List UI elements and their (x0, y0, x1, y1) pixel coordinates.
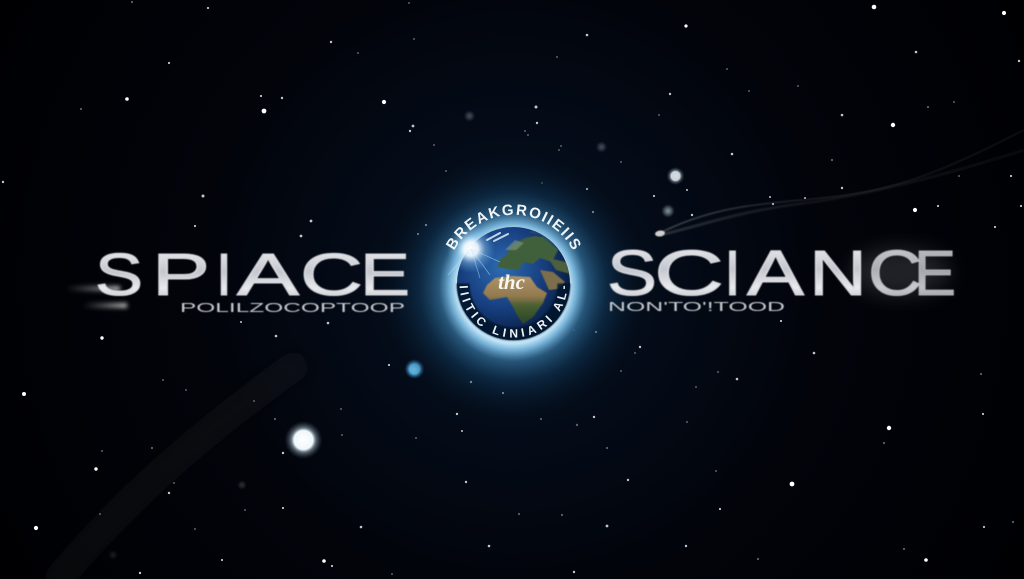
right subtitle: NON'TO'!TOOD (608, 300, 785, 314)
motion streaks on S (66, 286, 127, 308)
globe ocean (457, 227, 570, 340)
sunlight flare (447, 225, 500, 278)
right word blur glow (850, 248, 950, 296)
left subtitle: POLILZOCOPTOOP (180, 301, 405, 315)
left word: SPIACE: E (360, 242, 410, 308)
glowing star upper right (666, 167, 684, 185)
left word: SPIACE (66, 242, 410, 308)
comet with trail (655, 130, 1024, 237)
left word: SPIACE: I (216, 242, 232, 308)
blue star (404, 359, 424, 379)
left word: SPIACE: C (300, 242, 363, 308)
continents (483, 226, 570, 324)
right word: SCIANCE: C (654, 237, 724, 309)
right word: SCIANCE (607, 237, 956, 309)
curved heading bottom: IIITIC LINIARI AL- (460, 286, 567, 338)
globe (447, 225, 570, 340)
right word: SCIANCE: E (914, 237, 956, 309)
large white star (284, 421, 322, 459)
left word: SPIACE: A (237, 242, 300, 308)
right word: SCIANCE: A (747, 237, 804, 309)
left word: SPIACE: P (152, 242, 210, 308)
faint diagonal light band (50, 358, 305, 579)
right word: SCIANCE: C (868, 237, 922, 309)
right word: SCIANCE: I (724, 237, 741, 309)
dark lower band for ring lettering (463, 284, 564, 334)
cloud streaks (487, 233, 508, 241)
right word: SCIANCE: N (809, 237, 867, 309)
globe center word: thc (498, 270, 526, 294)
right word: SCIANCE: S (607, 237, 657, 309)
left word: SPIACE: S (95, 242, 143, 308)
dim fuzzy stars (108, 110, 675, 560)
curved heading top: BREAKGROIIEIIS (446, 204, 580, 250)
globe halo (378, 152, 648, 422)
